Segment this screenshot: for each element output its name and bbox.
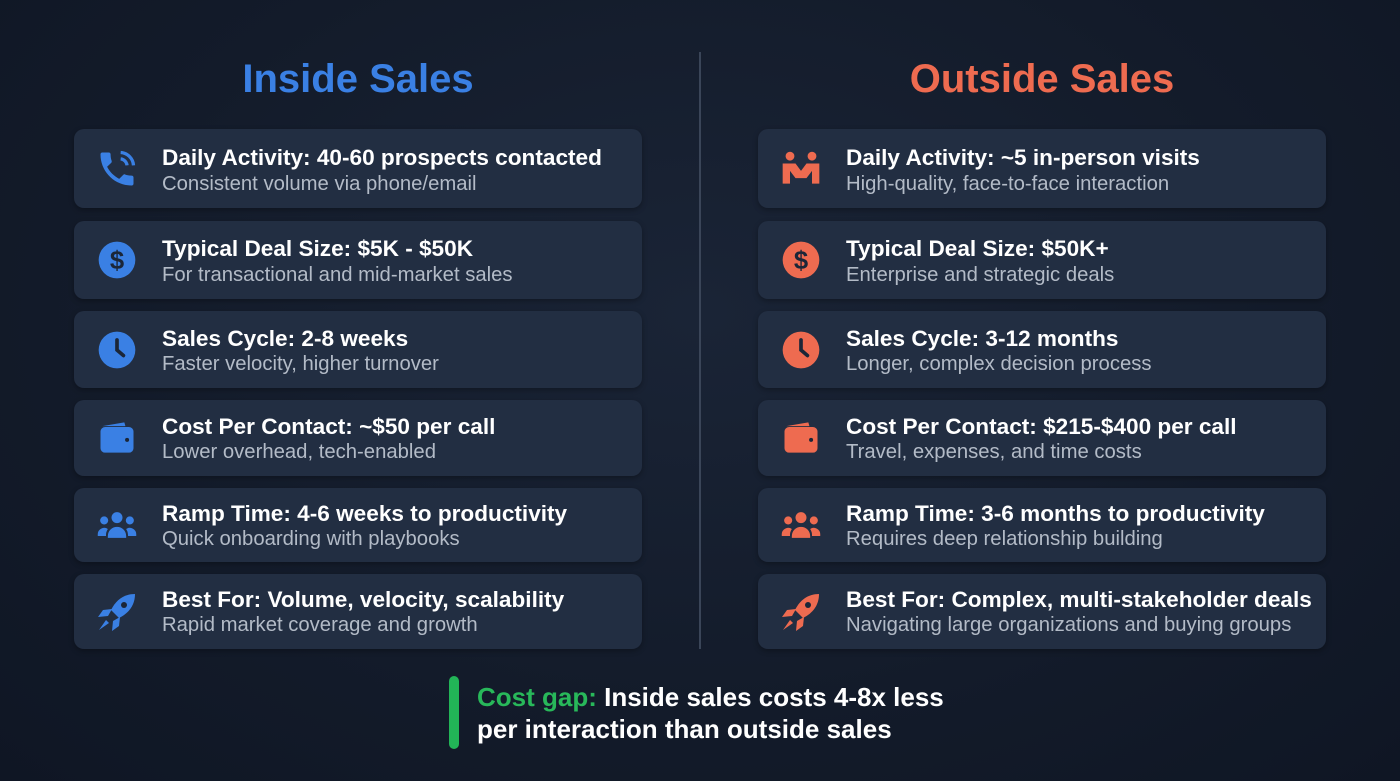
card: outside ramp time <box>758 488 1326 562</box>
card: outside ramp time: Ramp Time: 3-6 months to productivity <box>846 501 1265 526</box>
card: outside deal size <box>758 221 1326 299</box>
card: outside cost per contact: Cost Per Contact: $215-$400 per call <box>846 414 1237 439</box>
title: Inside Sales: Inside Sales <box>242 57 474 101</box>
icon: wallet <box>100 422 134 453</box>
card: inside ramp time: Ramp Time: 4-6 weeks to productivity <box>162 501 567 526</box>
icon: phone <box>100 150 136 186</box>
card: outside deal size: Typical Deal Size: $50K+ <box>846 236 1109 261</box>
card: inside best for: Rapid market coverage and growth <box>162 614 478 636</box>
icon: clock <box>782 332 820 368</box>
icon: dollar: $ <box>110 247 124 275</box>
icon: wallet <box>784 422 818 453</box>
card: inside cost per contact: Cost Per Contact: ~$50 per call <box>162 414 495 439</box>
card: outside daily activity: High-quality, face-to-face interaction <box>846 173 1169 195</box>
callout: cost gap: Cost gap: Inside sales costs 4-8x less <box>477 682 944 712</box>
icon: handshake people <box>782 152 820 184</box>
card: outside ramp time: Requires deep relationship building <box>846 528 1163 550</box>
card: outside sales cycle <box>758 311 1326 388</box>
card: outside daily activity <box>758 129 1326 208</box>
icon: dollar <box>782 242 820 278</box>
card: inside best for <box>74 574 642 649</box>
card: inside daily activity <box>74 129 642 208</box>
card: outside deal size: Enterprise and strategic deals <box>846 264 1114 286</box>
card: outside cost per contact: Travel, expenses, and time costs <box>846 441 1142 463</box>
callout: cost gap <box>449 676 944 749</box>
card: inside cost per contact: Lower overhead, tech-enabled <box>162 441 436 463</box>
card: outside sales cycle: Longer, complex decision process <box>846 353 1152 375</box>
title: Outside Sales: Outside Sales <box>910 57 1174 101</box>
card: inside best for: Best For: Volume, velocity, scalability <box>162 587 564 612</box>
card: outside best for <box>758 574 1326 649</box>
card: inside deal size: For transactional and mid-market sales <box>162 264 513 286</box>
card: outside sales cycle: Sales Cycle: 3-12 months <box>846 326 1118 351</box>
card: inside ramp time: Quick onboarding with playbooks <box>162 528 460 550</box>
card: outside daily activity: Daily Activity: ~5 in-person visits <box>846 145 1200 170</box>
card: inside deal size <box>74 221 642 299</box>
card: inside sales cycle: Sales Cycle: 2-8 weeks <box>162 326 408 351</box>
icon: clock <box>98 332 136 368</box>
card: inside daily activity: Consistent volume via phone/email <box>162 173 477 195</box>
icon: dollar <box>98 242 136 278</box>
icon: rocket <box>98 594 135 631</box>
icon: team <box>782 512 820 538</box>
card: outside best for: Best For: Complex, multi-stakeholder deals <box>846 587 1312 612</box>
card: inside cost per contact <box>74 400 642 476</box>
callout: cost gap: per interaction than outside sales <box>477 714 892 744</box>
card: inside deal size: Typical Deal Size: $5K - $50K <box>162 236 473 261</box>
icon: dollar: $ <box>794 247 808 275</box>
divider <box>699 52 701 649</box>
icon: team <box>98 512 136 538</box>
card: inside sales cycle: Faster velocity, higher turnover <box>162 353 439 375</box>
icon: rocket <box>782 594 819 631</box>
card: inside daily activity: Daily Activity: 40-60 prospects contacted <box>162 145 602 170</box>
card: outside best for: Navigating large organizations and buying groups <box>846 614 1291 636</box>
card: inside ramp time <box>74 488 642 562</box>
card: inside sales cycle <box>74 311 642 388</box>
card: outside cost per contact <box>758 400 1326 476</box>
